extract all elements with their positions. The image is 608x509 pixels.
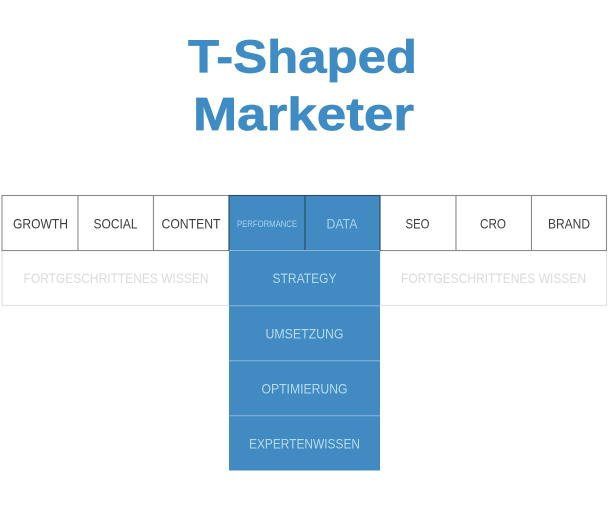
panel: right skill columns: [380, 196, 606, 250]
skill: seo: SEO: [406, 216, 430, 232]
title: Marketer: [193, 88, 414, 140]
skill: social: [78, 196, 154, 250]
skill: content: [154, 196, 229, 250]
skill: data: [305, 196, 380, 250]
skill: performance: PERFORMANCE: [237, 219, 297, 229]
skill: content: CONTENT: [162, 216, 221, 232]
title: [188, 30, 417, 140]
skill: data: DATA: [326, 216, 358, 232]
level: optimierung: [229, 361, 380, 416]
skill: growth: [2, 196, 78, 250]
level: optimierung: OPTIMIERUNG: [262, 380, 348, 396]
skill: brand: [532, 196, 606, 250]
panel: right advanced knowledge: [380, 250, 606, 306]
level: expertenwissen: [229, 416, 380, 470]
skill: social: SOCIAL: [94, 216, 138, 232]
skill: growth: GROWTH: [13, 216, 68, 232]
title: T-Shaped: [188, 30, 417, 82]
skill: brand: BRAND: [548, 216, 590, 232]
level: strategy: STRATEGY: [272, 270, 337, 286]
skill: performance: [229, 196, 305, 250]
level: umsetzung: [229, 306, 380, 361]
panel: left advanced knowledge: [2, 250, 229, 306]
level: strategy: [229, 251, 380, 306]
panel: left skill columns: [2, 196, 229, 250]
skill: cro: [456, 196, 532, 250]
column background: [229, 196, 380, 470]
level: expertenwissen: EXPERTENWISSEN: [249, 436, 360, 452]
panel: central expertise column: [229, 196, 380, 470]
level: umsetzung: UMSETZUNG: [266, 326, 344, 342]
panel: left advanced knowledge: FORTGESCHRITTENES WISSEN: [24, 270, 208, 286]
skill: cro: CRO: [480, 216, 506, 232]
skill: seo: [380, 196, 456, 250]
